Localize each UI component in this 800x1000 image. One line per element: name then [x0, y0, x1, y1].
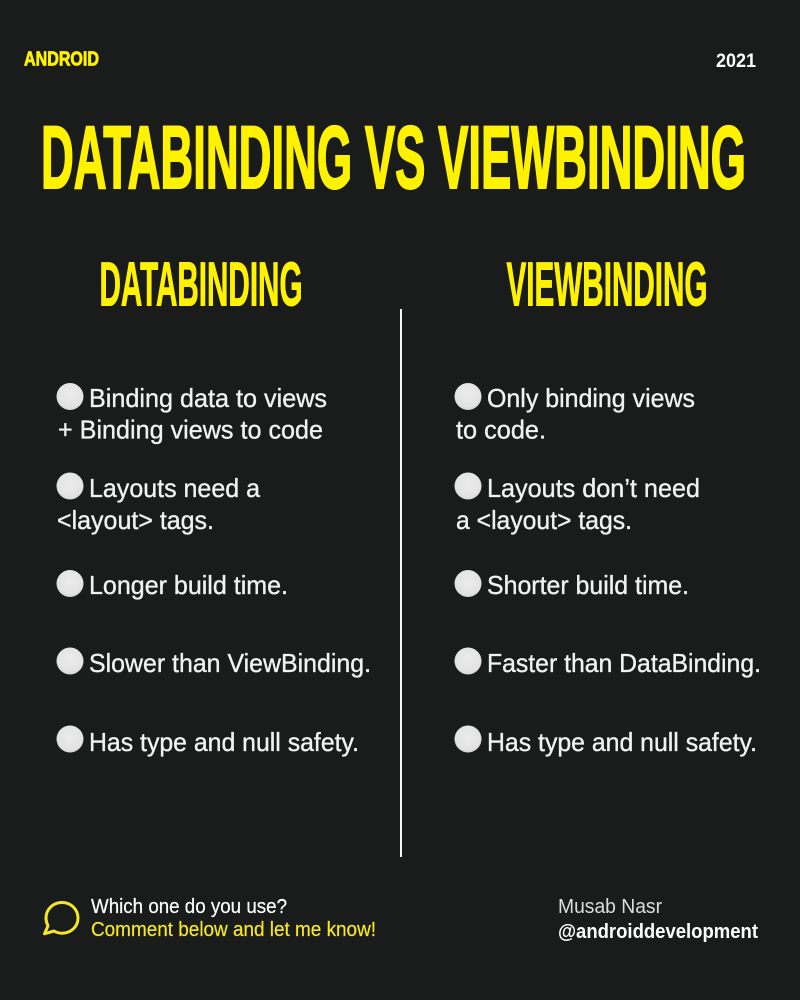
panel: viewbinding: [454, 250, 761, 757]
call to action: Which one do you use?: [91, 896, 287, 918]
tag: android: ANDROID: [24, 48, 99, 70]
point: binding data: [56, 383, 327, 444]
author: [558, 896, 758, 943]
author: Musab Nasr: [558, 896, 662, 918]
point: build time: Longer build time.: [89, 570, 288, 600]
point: speed: Slower than ViewBinding.: [89, 648, 371, 678]
point: safety: Has type and null safety.: [487, 727, 757, 757]
point: layouts: a <layout> tags.: [456, 505, 632, 535]
point: binding data: + Binding views to code: [58, 414, 323, 444]
point: binding data: Binding data to views: [89, 383, 327, 413]
point: binding views: [454, 383, 695, 444]
point: safety: Has type and null safety.: [89, 727, 359, 757]
point: layouts: [454, 472, 700, 535]
point: binding views: to code.: [456, 414, 546, 444]
point: layouts: <layout> tags.: [57, 505, 214, 535]
point: layouts: Layouts need a: [89, 473, 261, 503]
point: binding views: Only binding views: [487, 383, 695, 413]
call to action: [91, 896, 376, 941]
point: speed: Faster than DataBinding.: [487, 648, 761, 678]
author: @androiddevelopment: [558, 921, 758, 943]
icon: speech bubble: [44, 902, 78, 934]
panel: databinding: [56, 250, 371, 757]
year: 2021: [716, 51, 756, 72]
point: layouts: [56, 472, 261, 535]
point: layouts: Layouts don’t need: [487, 473, 700, 503]
panel: databinding: DATABINDING: [100, 250, 302, 320]
point: build time: Shorter build time.: [487, 570, 689, 600]
divider: [400, 309, 402, 857]
call to action: Comment below and let me know!: [91, 919, 376, 941]
